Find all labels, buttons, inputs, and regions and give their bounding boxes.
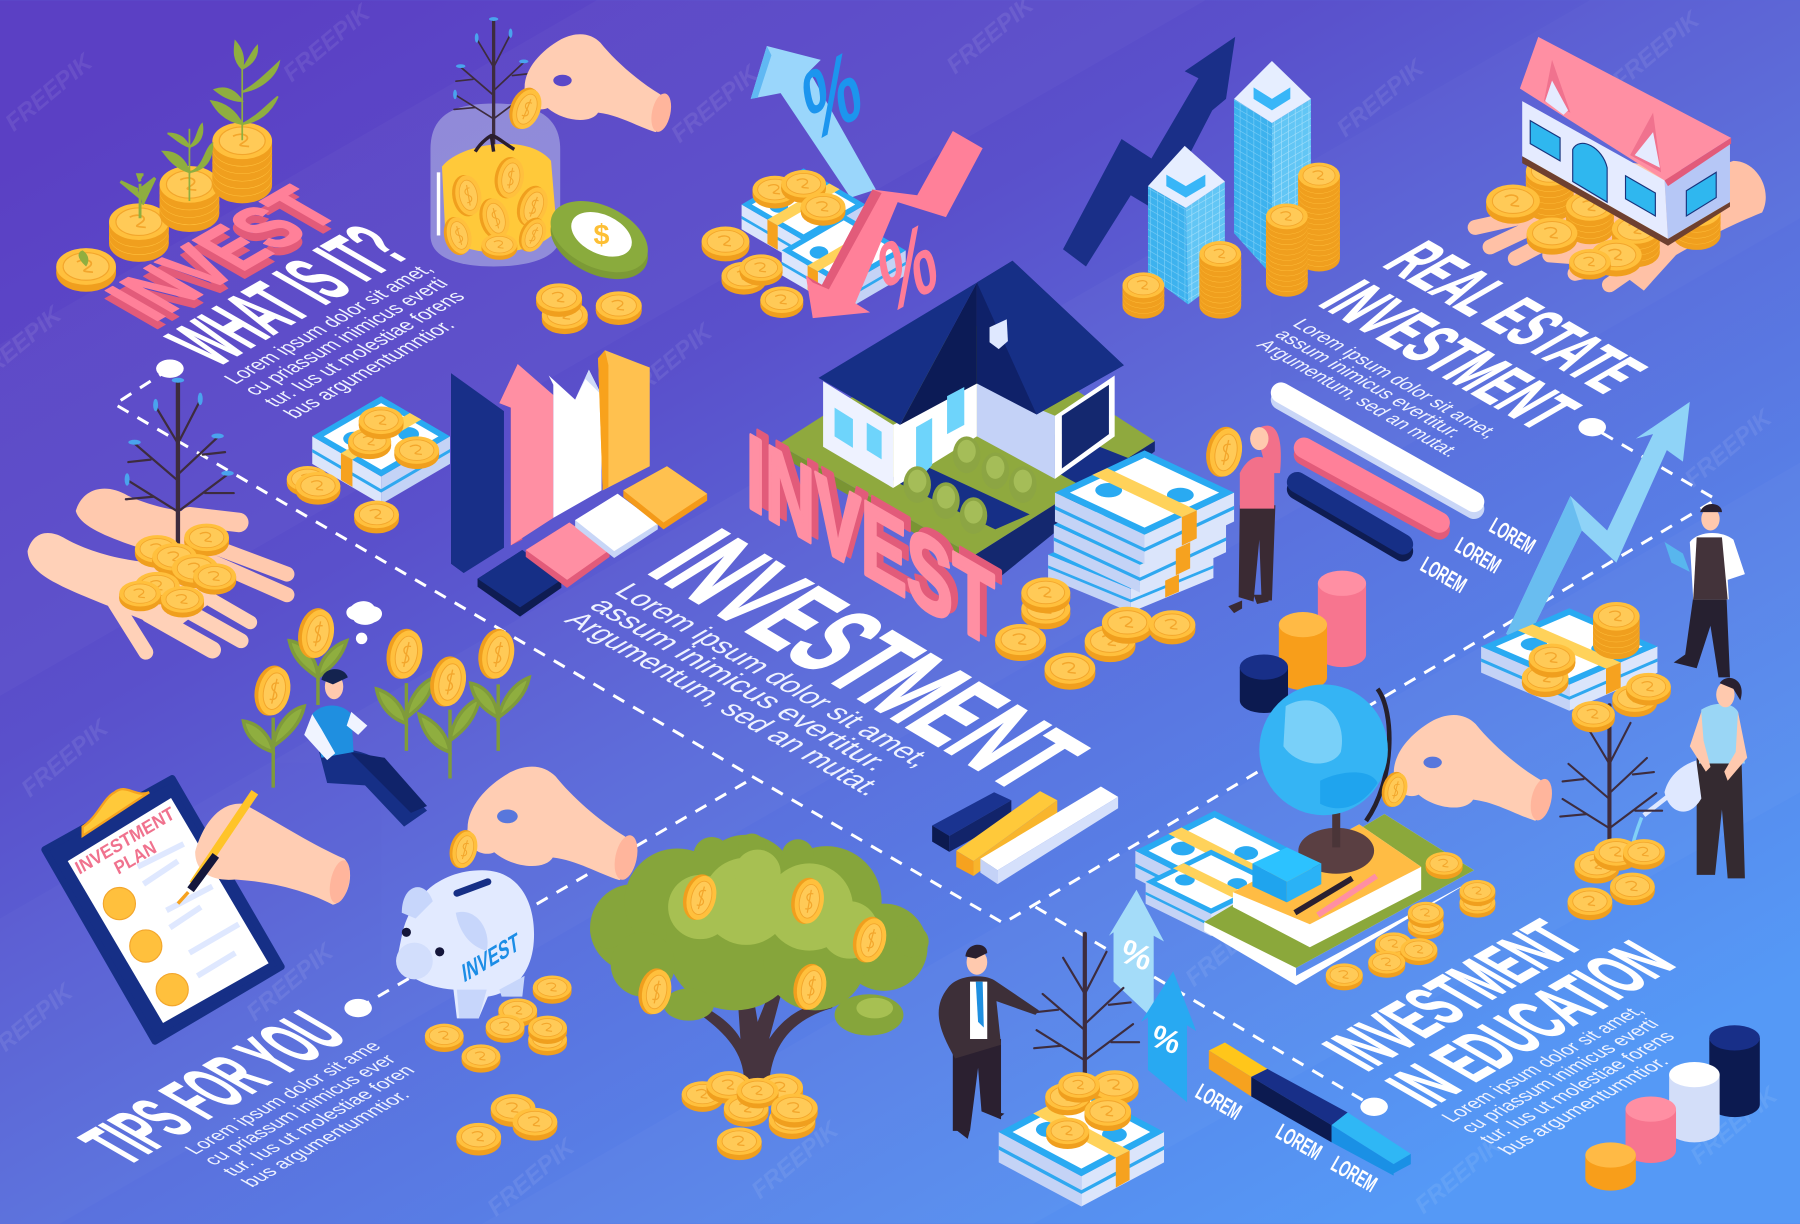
icon: percent up arrows bbox=[1109, 890, 1196, 1102]
icon: rising light-blue arrow bbox=[1506, 402, 1690, 645]
icon: cash and coins left bbox=[287, 396, 450, 533]
heading: INVEST 3D floor letters: INVEST bbox=[86, 175, 359, 332]
heading: real estate investment bbox=[1302, 231, 1664, 440]
icon: piggy bank bbox=[396, 870, 534, 1018]
icon: percent up arrows: % bbox=[1115, 933, 1157, 979]
icon: coin flowers with sitting man bbox=[243, 601, 529, 827]
icon: central house on green plot bbox=[778, 261, 1155, 575]
labels: bottom bar: LOREM bbox=[1327, 1151, 1382, 1197]
text: investment body: Lorem ipsum dolor sit amet, bbox=[607, 578, 941, 772]
watermarks: FREEPIK bbox=[1607, 5, 1706, 94]
watermarks: FREEPIK bbox=[666, 59, 765, 148]
heading: INVEST 3D floor letters bbox=[86, 175, 359, 340]
watermarks: FREEPIK bbox=[1680, 404, 1778, 493]
connector dots bbox=[156, 359, 1606, 1116]
watermarks: FREEPIK bbox=[1332, 54, 1430, 142]
text: tips body: cu priassum inimicus ever bbox=[199, 1052, 402, 1168]
text: education body: cu priassum inimicus everti bbox=[1455, 1016, 1664, 1136]
icon: money tree bbox=[590, 834, 929, 1085]
icon: sprouting coin stacks bbox=[56, 41, 279, 292]
text: investment body: Argumentum, sed an mutat. bbox=[557, 607, 892, 800]
icon: sapling and cash bottom bbox=[999, 934, 1164, 1207]
chart: rounded bars right bbox=[1281, 393, 1474, 551]
icon: jar with coins and tree bbox=[430, 17, 560, 266]
heading: tips for you: TIPS FOR YOU bbox=[61, 1000, 366, 1175]
heading: INVEST standing 3D letters: INVEST bbox=[746, 410, 995, 672]
icon: piggy bank: INVEST bbox=[460, 927, 521, 989]
chart: stepped bars under heading bbox=[932, 786, 1118, 884]
watermarks: FREEPIK bbox=[241, 938, 340, 1026]
icon: coins near books bbox=[1326, 852, 1495, 990]
watermarks: FREEPIK bbox=[746, 1116, 845, 1204]
heading: INVEST standing 3D letters bbox=[746, 406, 1002, 672]
labels: bars right: LOREM bbox=[1485, 512, 1540, 559]
chart: 3D bar chart bbox=[451, 350, 707, 617]
text: what is it body: tur. Ius ut molestiae forens bbox=[258, 287, 470, 410]
text: tips body: bus argumentumntior. bbox=[237, 1087, 415, 1190]
figure: woman holding coin bbox=[1202, 424, 1281, 613]
text: education body: Lorem ipsum dolor sit amet, bbox=[1437, 1002, 1649, 1125]
icon: tree in open hands bbox=[28, 378, 287, 652]
icon: cash and coins under arrows bbox=[702, 168, 906, 318]
text: real estate body: Argumentum, sed an mutat. bbox=[1251, 337, 1465, 460]
watermarks: FREEPIK bbox=[1685, 1081, 1784, 1170]
dashed connector lines bbox=[115, 369, 1716, 1107]
icon: cash near globe bbox=[1135, 811, 1294, 936]
icon: hand dropping coin in jar bbox=[504, 34, 674, 134]
icon: blue percent arrow bbox=[751, 26, 876, 198]
watermarks: FREEPIK bbox=[620, 318, 719, 407]
text: education body: bus argumentumntior. bbox=[1493, 1054, 1674, 1158]
icon: green dollar badge: $ bbox=[594, 220, 610, 252]
chart: cylinders bottom right bbox=[1585, 1025, 1760, 1191]
text: investment body: assum inimicus evertitur. bbox=[582, 593, 899, 776]
icon: hand writing with pen bbox=[178, 792, 353, 905]
text: what is it body: Lorem ipsum dolor sit amet, bbox=[218, 260, 438, 387]
text: tips body: Lorem ipsum dolor sit ame bbox=[180, 1039, 386, 1157]
chart: cylinders centre right bbox=[1240, 571, 1366, 713]
icon: globe on books bbox=[1204, 684, 1474, 985]
labels: bottom bar bbox=[1191, 1078, 1382, 1197]
icon: tower coin stacks bbox=[1122, 163, 1340, 319]
watermarks: FREEPIK bbox=[1410, 1130, 1509, 1219]
heading: real estate investment: INVESTMENT bbox=[1302, 270, 1596, 440]
watermarks: FREEPIK bbox=[893, 289, 992, 378]
icon: pink down arrow and percent bbox=[806, 131, 983, 336]
figure: businessman bbox=[939, 945, 1039, 1139]
icon: percent up arrows: % bbox=[1147, 1018, 1186, 1061]
heading: investment: INVESTMENT bbox=[622, 513, 1112, 808]
text: real estate body: Lorem ipsum dolor sit amet, bbox=[1287, 316, 1504, 441]
labels: bars right: LOREM bbox=[1416, 551, 1471, 598]
icon: dark rising arrow bbox=[1063, 37, 1235, 266]
icon: coins near piggy bbox=[425, 975, 572, 1156]
icon: cash and coins right bbox=[1481, 602, 1671, 717]
panel: clipboard investment plan: PLAN bbox=[111, 836, 160, 878]
watermarks: FREEPIK bbox=[482, 1133, 581, 1222]
watermarks: FREEPIK bbox=[278, 0, 377, 87]
icon: coins centre bbox=[995, 577, 1195, 690]
heading: investment in education bbox=[1305, 909, 1692, 1118]
figure: woman watering tree bbox=[1630, 678, 1747, 878]
icon: hands holding pink house bbox=[1475, 37, 1766, 291]
text: what is it body: cu priassum inimicus everti bbox=[238, 274, 453, 399]
icon: blue percent arrow: % bbox=[796, 26, 868, 164]
labels: bottom bar: LOREM bbox=[1272, 1118, 1326, 1165]
watermarks: FREEPIK bbox=[16, 714, 115, 803]
labels: bars right bbox=[1416, 512, 1540, 598]
icon: cash stacks centre bbox=[1048, 450, 1234, 612]
watermarks: FREEPIK bbox=[1180, 903, 1279, 992]
heading: what is it: WHAT IS IT? bbox=[147, 213, 430, 377]
heading: INVEST 3D floor letters: INVEST bbox=[86, 183, 359, 340]
text: education body: tur. Ius ut molestiae forens bbox=[1474, 1028, 1680, 1147]
labels: bars right: LOREM bbox=[1451, 532, 1506, 578]
watermarks: FREEPIK bbox=[0, 48, 99, 137]
icon: green dollar badge bbox=[539, 187, 659, 293]
text: tips body bbox=[180, 1039, 443, 1190]
icon: coins under tree bbox=[682, 1071, 818, 1160]
figure: man with tablet bbox=[1665, 504, 1745, 677]
icon: hand with coin at globe bbox=[1378, 715, 1555, 822]
panel: clipboard investment plan bbox=[45, 778, 281, 1041]
icon: loose coins top bbox=[536, 283, 642, 334]
text: real estate body: assum inimicus evertitur. bbox=[1269, 326, 1468, 441]
text: tips body: tur. Ius ut molestiae foren bbox=[218, 1063, 420, 1179]
labels: bottom bar: LOREM bbox=[1191, 1078, 1246, 1125]
icon: hand dropping coin in piggy bbox=[445, 767, 641, 882]
text: what is it body: bus argumentumntior. bbox=[278, 316, 460, 422]
chart: stacked bar bottom bbox=[1209, 1042, 1411, 1176]
heading: INVEST standing 3D letters: INVEST bbox=[753, 406, 1002, 667]
icon: watered tree and coins bbox=[1560, 701, 1665, 920]
icon: pink down arrow and percent: % bbox=[871, 198, 944, 336]
panel: clipboard investment plan: INVESTMENT bbox=[72, 802, 178, 878]
icon: skyscrapers bbox=[1148, 61, 1311, 304]
